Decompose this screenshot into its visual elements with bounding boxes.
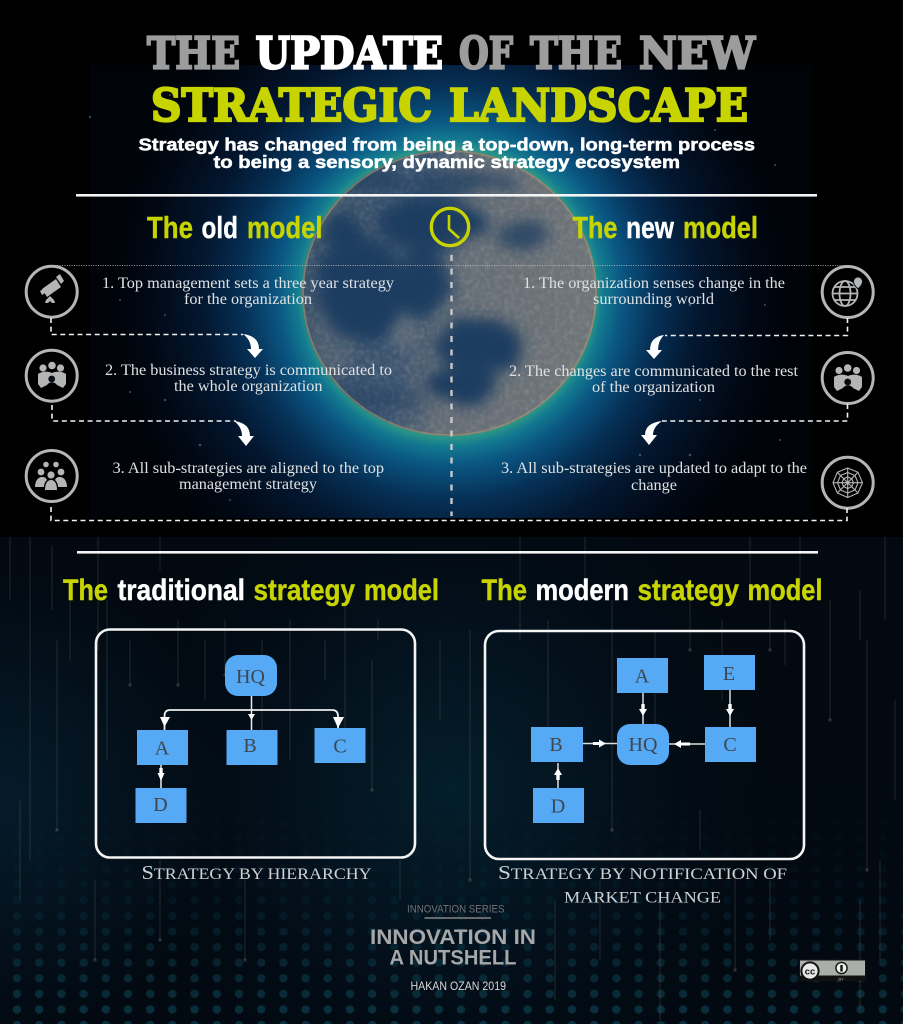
heading: the modern strategy model: The — [482, 574, 527, 607]
connector 2 — [52, 405, 254, 446]
moon — [300, 148, 600, 440]
heading: the new model: model — [683, 210, 758, 245]
divider lower — [77, 551, 818, 554]
node A — [137, 730, 188, 765]
node D: D — [153, 794, 168, 816]
heading: the traditional strategy model: traditional — [118, 574, 245, 607]
title line 1: OF — [459, 28, 513, 79]
icon: clock — [431, 208, 469, 246]
icon: spider web — [822, 457, 873, 508]
panel: new model steps — [51, 266, 873, 520]
step 3 text: change — [631, 477, 677, 494]
heading: the modern strategy model: model — [748, 574, 822, 607]
connector 3: bottom line — [51, 506, 847, 520]
step 3 text — [501, 460, 807, 494]
connectors — [161, 696, 338, 788]
arrowheads — [158, 714, 344, 781]
step 1 text — [102, 275, 394, 308]
icon: group — [26, 450, 77, 502]
node D — [136, 788, 186, 823]
arrowheads — [554, 704, 734, 780]
node D — [533, 788, 584, 823]
connector 1 — [646, 318, 848, 359]
title — [147, 28, 756, 132]
subtitle: to being a sensory, dynamic strategy ecosystem — [214, 152, 680, 172]
heading: the traditional strategy model: model — [364, 574, 439, 607]
node B: B — [243, 735, 257, 757]
step 1 text: surrounding world — [593, 291, 714, 308]
connector 1 — [51, 318, 263, 358]
heading: the old model: model — [247, 210, 322, 245]
node C: C — [333, 736, 347, 758]
node D: D — [551, 796, 565, 818]
node A: A — [635, 666, 650, 688]
subtitle: Strategy has changed from being a top-down, long-term process — [138, 134, 755, 154]
dotted separator — [50, 264, 848, 266]
footer: book title: A NUTSHELL — [390, 946, 517, 970]
node HQ — [617, 724, 669, 765]
connector 2 — [641, 404, 848, 445]
title line 2 — [151, 79, 748, 132]
step 3 text: 3. All sub-strategies are aligned to the top — [112, 460, 384, 477]
node C: C — [723, 734, 737, 756]
node C — [705, 727, 756, 762]
caption: notification — [498, 862, 787, 906]
caption: notification: MARKET CHANGE — [564, 890, 721, 906]
node C — [314, 728, 366, 763]
background: stars — [89, 94, 781, 501]
node HQ: HQ — [236, 666, 265, 688]
node B — [531, 727, 583, 762]
step 1 text: for the organization — [184, 291, 312, 308]
node B — [226, 730, 278, 765]
panel: modern diagram — [485, 631, 804, 859]
heading: the new model: new — [626, 210, 675, 245]
caption: hierarchy: STRATEGY BY HIERARCHY — [142, 862, 372, 884]
icon: creative commons badge — [799, 959, 866, 982]
step 2 text — [105, 362, 392, 395]
heading: the modern strategy model — [482, 574, 822, 607]
node A — [617, 658, 668, 693]
step 2 text: 2. The changes are communicated to the rest — [509, 363, 799, 380]
subtitle — [138, 134, 755, 172]
step 1 text: 1. The organization senses change in the — [523, 275, 785, 292]
node B: B — [549, 734, 563, 756]
icon: telescope — [26, 266, 77, 317]
title line 1: UPDATE — [256, 28, 443, 79]
heading: the old model — [147, 210, 322, 245]
divider top — [76, 194, 817, 197]
title line 1: THE — [147, 28, 240, 79]
title line 1: NEW — [639, 28, 756, 79]
step 3 text: 3. All sub-strategies are updated to adapt to the — [501, 460, 807, 477]
step 2 text: the whole organization — [174, 378, 323, 395]
panel: old model steps — [26, 266, 394, 502]
node E — [704, 655, 755, 690]
heading: the old model: old — [202, 210, 238, 245]
title line 2: STRATEGIC — [151, 79, 432, 132]
connectors — [558, 690, 730, 788]
heading: the traditional strategy model: The — [63, 574, 108, 607]
footer: series label: INNOVATION SERIES — [407, 904, 504, 916]
footer: author: HAKAN OZAN 2019 — [410, 979, 506, 993]
vertical dashed divider — [450, 255, 453, 516]
heading: the new model: The — [572, 210, 618, 245]
node HQ — [225, 655, 277, 696]
step 2 text: of the organization — [592, 379, 715, 396]
title line 1: THE — [530, 28, 622, 79]
footer: book title: INNOVATION IN — [370, 926, 536, 949]
step 3 text — [112, 460, 384, 493]
panel: traditional diagram — [96, 630, 415, 858]
title line 2: LANDSCAPE — [449, 79, 748, 132]
heading: the modern strategy model: strategy — [638, 574, 739, 607]
footer: book title — [370, 926, 536, 970]
icon: globe with pin — [822, 266, 873, 318]
heading: the old model: The — [147, 210, 193, 245]
step 2 text — [509, 363, 799, 396]
icon: creative commons badge: BY — [838, 976, 844, 982]
step 1 text: 1. Top management sets a three year strategy — [102, 275, 394, 292]
heading: the new model — [572, 210, 758, 245]
lower section background — [0, 537, 903, 1024]
step 2 text: 2. The business strategy is communicated to — [105, 362, 392, 379]
icon: team — [26, 350, 77, 401]
heading: the traditional strategy model: strategy — [254, 574, 355, 607]
icon: team — [822, 352, 873, 404]
title line 1 — [147, 28, 756, 79]
node E: E — [723, 663, 735, 685]
node A: A — [155, 738, 170, 760]
icon: creative commons badge: cc — [805, 966, 815, 978]
node HQ: HQ — [629, 734, 658, 756]
step 1 text — [523, 275, 785, 308]
heading: the traditional strategy model — [63, 574, 439, 607]
background: space glow — [90, 65, 812, 518]
caption: notification: STRATEGY BY NOTIFICATION OF — [498, 862, 787, 884]
heading: the modern strategy model: modern — [536, 574, 629, 607]
step 3 text: management strategy — [179, 476, 317, 493]
